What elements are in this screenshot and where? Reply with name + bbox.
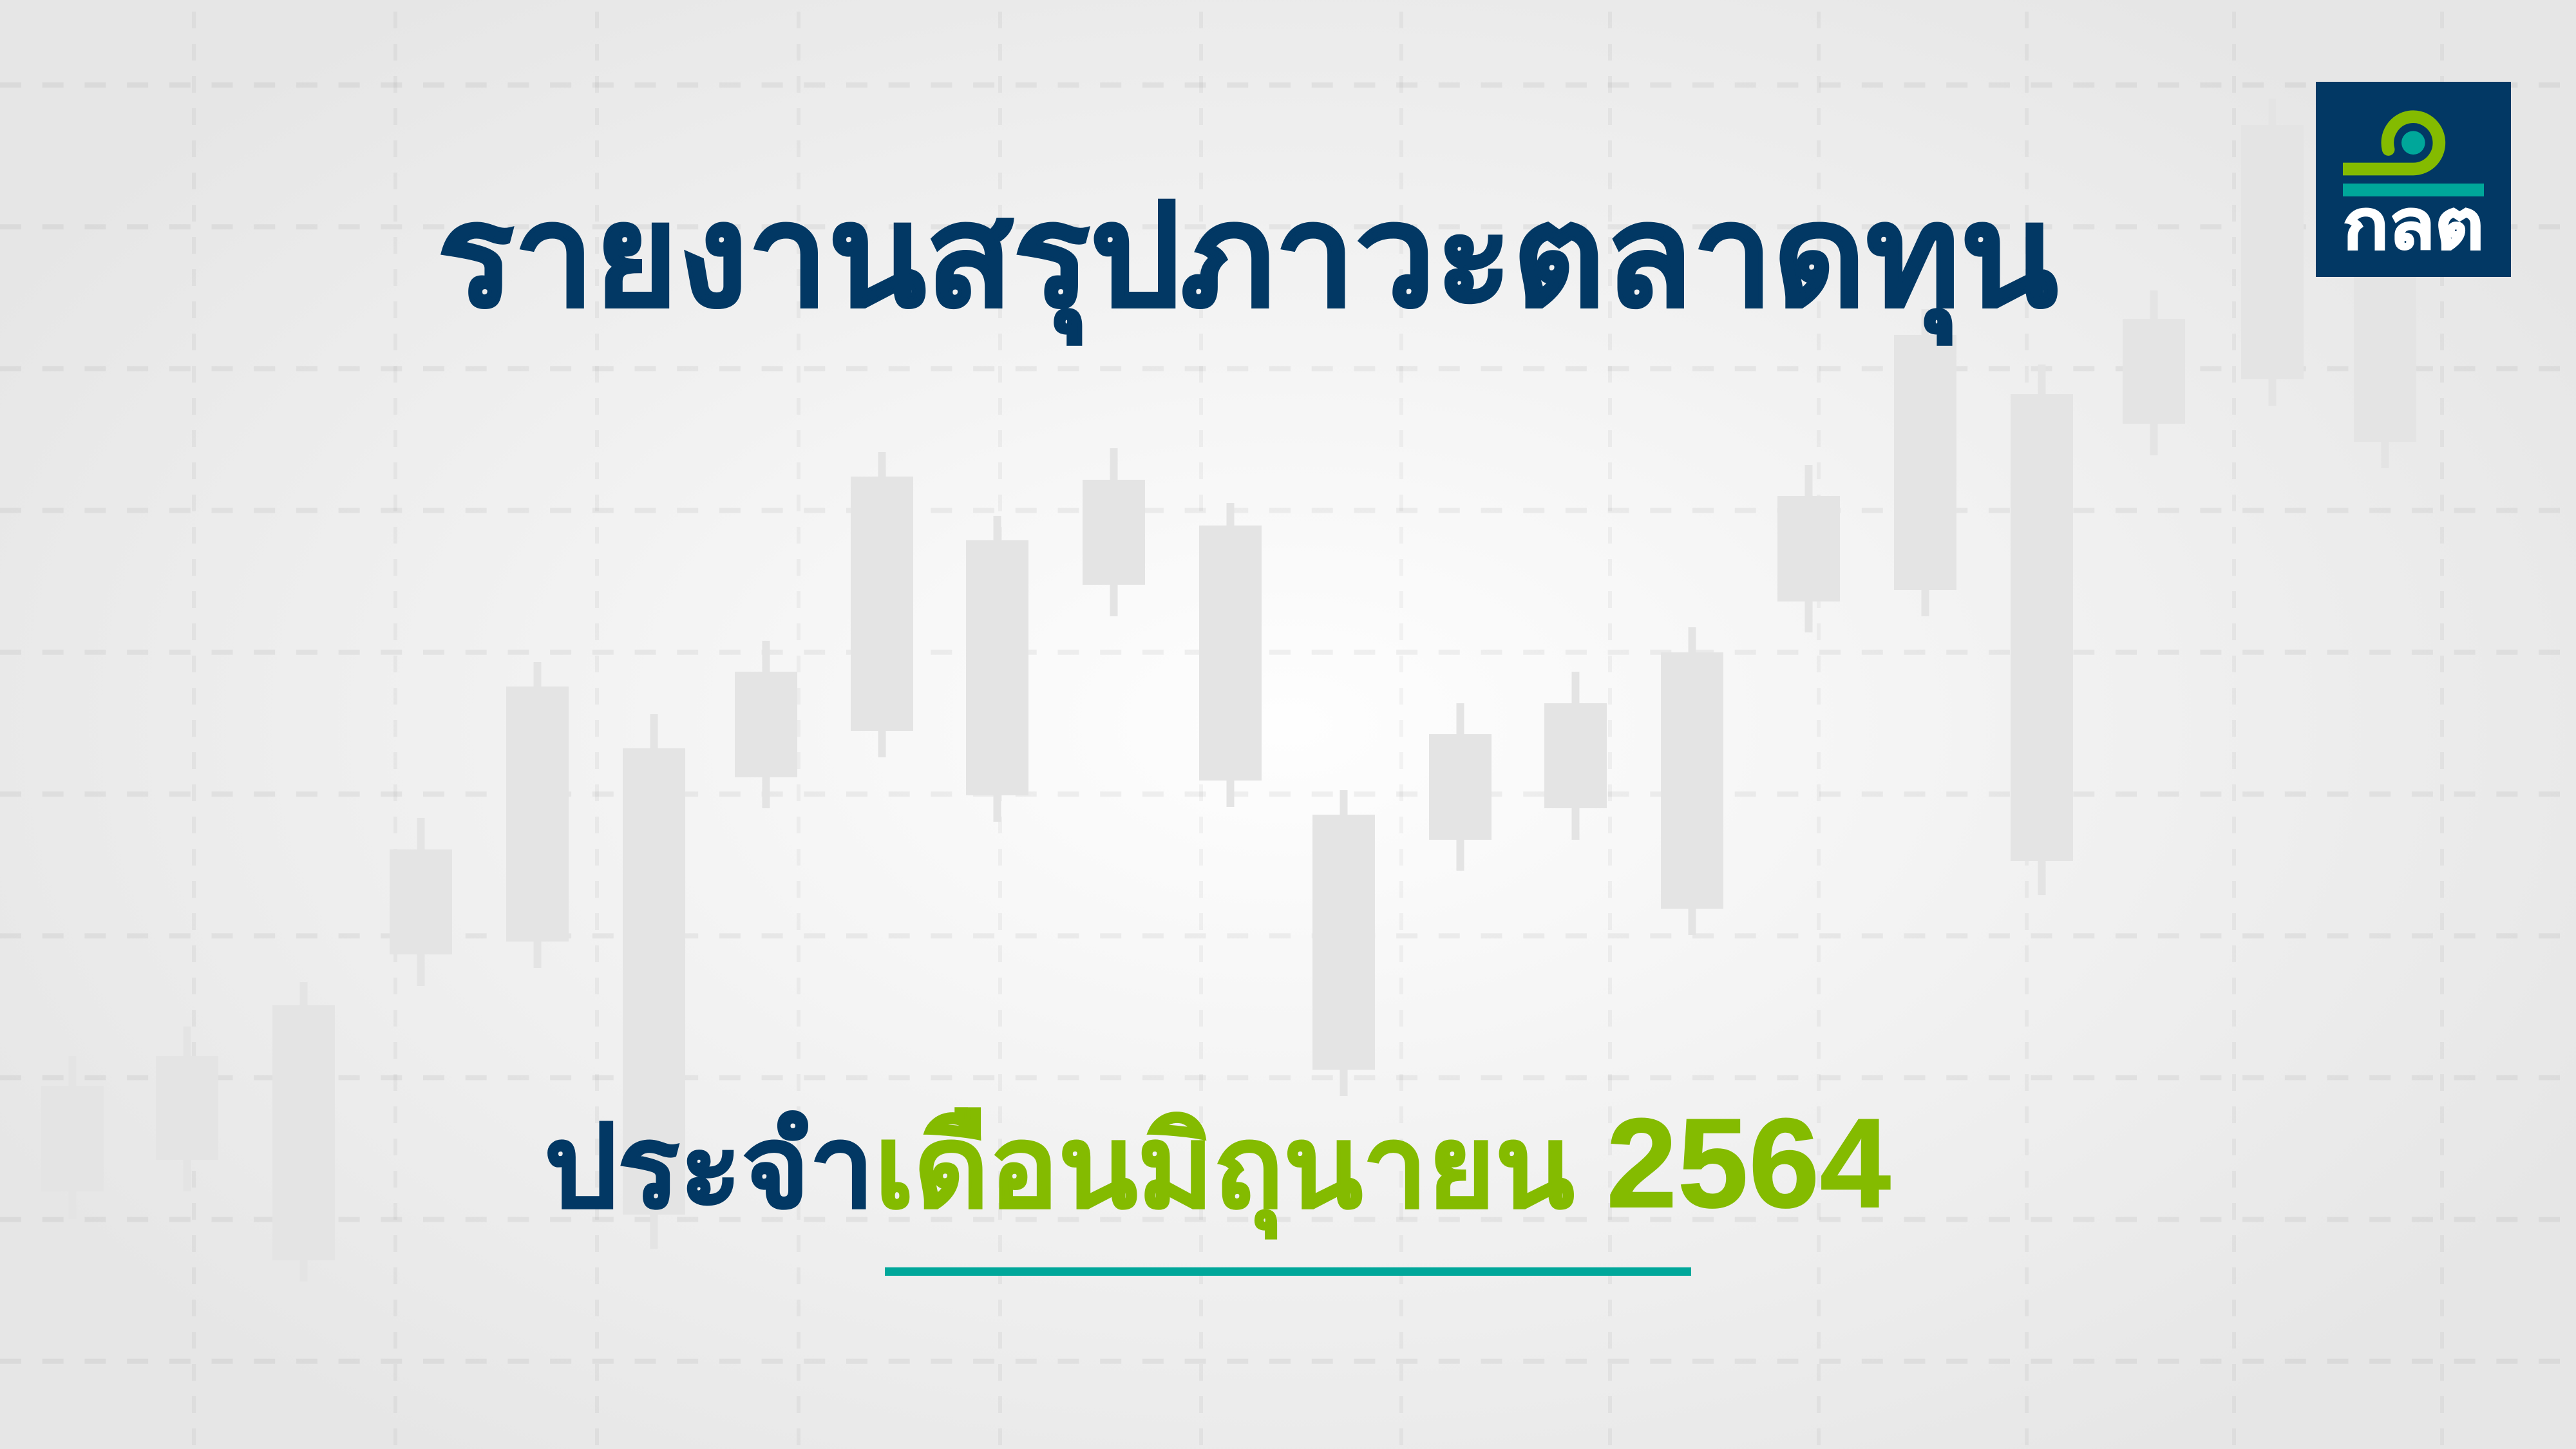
title: รายงานสรุปภาวะตลาดทุน [437,176,2058,336]
subtitle underline [885,1267,1691,1276]
subtitle: report month: ประจำเดือนมิถุนายน 2564 [544,1092,1891,1234]
logo: SEC Thailand [2316,82,2511,277]
logo wordmark: กลต [2343,186,2484,263]
icon: green spiral [2343,117,2439,169]
logo teal bar [2343,184,2484,196]
icon: teal dot [2401,131,2425,155]
